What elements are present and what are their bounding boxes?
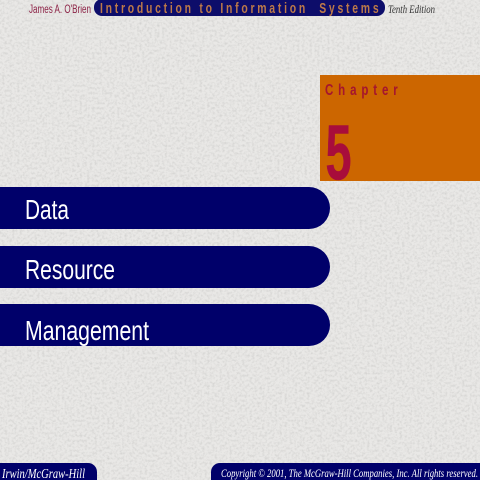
chapter panel [320,75,480,196]
title bar: Data: Data [25,194,69,225]
chapter label: Chapter [325,80,398,98]
edition: Tenth Edition [388,4,435,16]
book title pill: Introduction to Information Systems [100,0,379,16]
title bar: Data [0,187,330,229]
title bar: Management: Management [25,315,149,346]
title bar: Resource: Resource [25,254,115,285]
title bar: Management [0,304,330,346]
header bar [29,0,435,16]
author name: James A. O'Brien [29,4,91,16]
chapter number: 5 [326,109,352,196]
title bar: Resource [0,246,330,288]
footer: copyright [211,463,480,480]
